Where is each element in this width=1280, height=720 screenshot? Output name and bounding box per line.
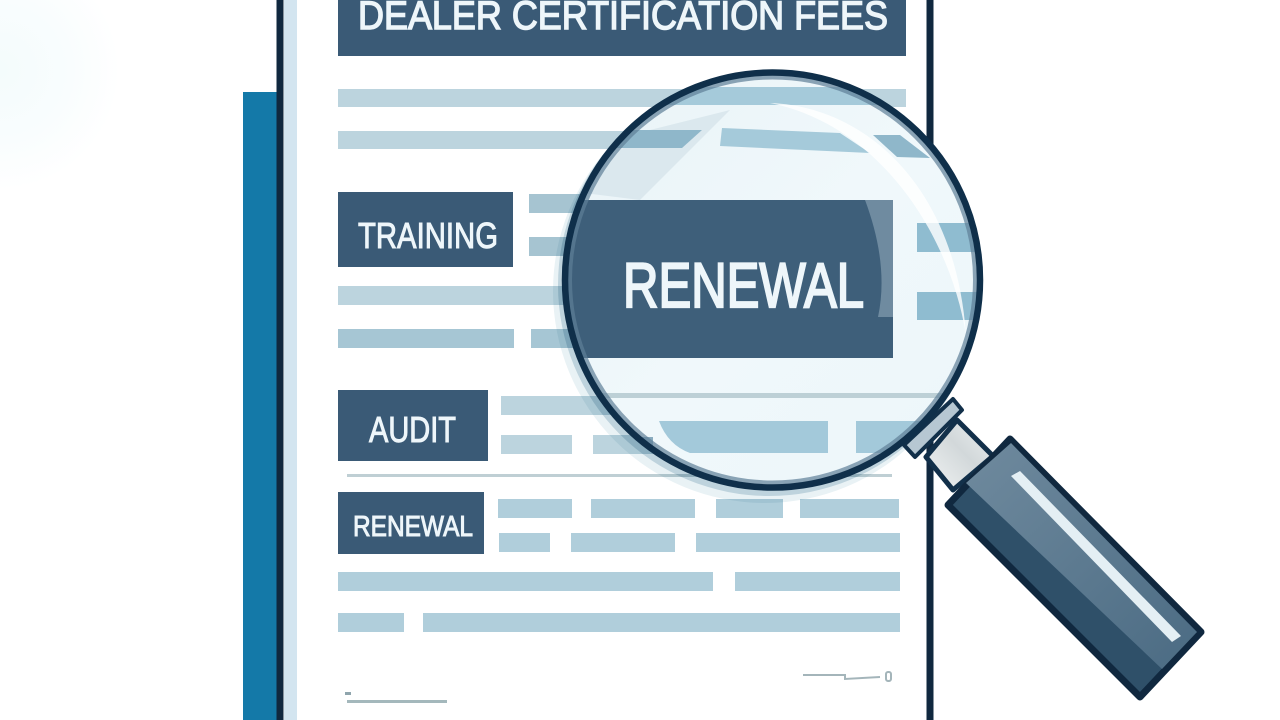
blue back page strip bbox=[243, 92, 277, 720]
signature mark: right bbox=[803, 672, 891, 681]
glass neck bbox=[926, 420, 993, 490]
label: renewal bbox=[338, 492, 484, 554]
glass ferrule bbox=[904, 399, 962, 457]
magnified label text: RENEWAL bbox=[623, 251, 864, 321]
label: audit: AUDIT bbox=[369, 409, 456, 450]
lens highlight crescent bbox=[770, 103, 966, 335]
title banner bbox=[338, 0, 906, 56]
magnifying glass bbox=[560, 72, 1201, 697]
text lines: training details bbox=[338, 194, 609, 348]
label: training bbox=[338, 192, 513, 267]
text lines: intro bbox=[338, 89, 906, 149]
label: audit bbox=[338, 390, 488, 461]
lens rim bbox=[565, 72, 980, 488]
lens shadow bbox=[553, 74, 980, 503]
glass handle bbox=[948, 439, 1201, 697]
text lines: renewal details bbox=[338, 499, 900, 632]
magnified document content bbox=[560, 87, 977, 455]
document page bbox=[280, 0, 930, 720]
signature mark: left bbox=[345, 692, 447, 703]
label: training: TRAINING bbox=[358, 215, 498, 256]
label: renewal: RENEWAL bbox=[353, 511, 473, 543]
text lines: audit details bbox=[347, 396, 892, 477]
lens bbox=[560, 72, 980, 488]
